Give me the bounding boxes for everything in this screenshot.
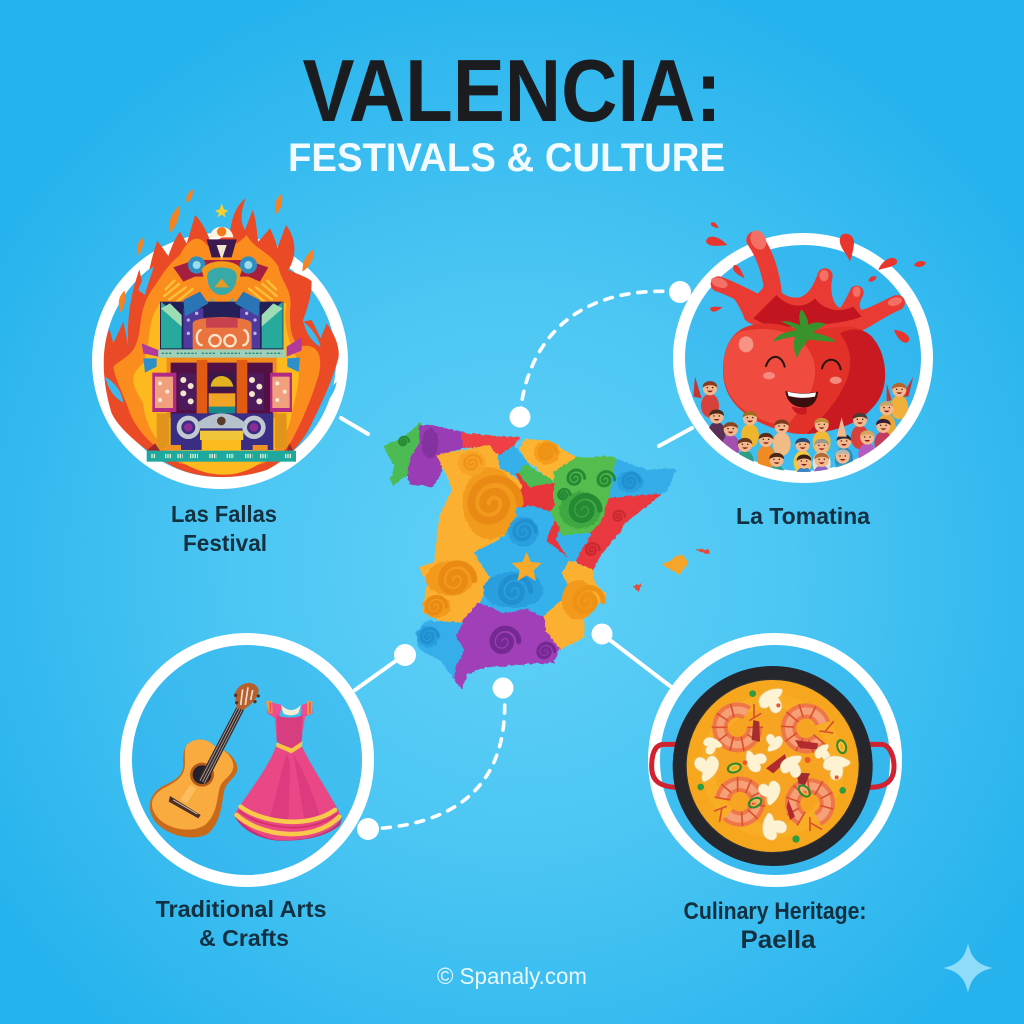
label: Las Fallas Festival xyxy=(171,501,277,556)
icon: tomato with splash and crowd xyxy=(693,222,926,491)
stem xyxy=(773,309,836,358)
droplets xyxy=(706,222,926,343)
label: La Tomatina: La Tomatina xyxy=(736,503,870,529)
mask head xyxy=(207,267,237,295)
crowd xyxy=(693,376,914,472)
label: Traditional Arts & Crafts: & Crafts xyxy=(199,925,289,951)
middle tier xyxy=(160,302,283,350)
splash xyxy=(718,240,897,325)
gold feather wings xyxy=(163,280,277,303)
star xyxy=(512,552,542,581)
panel: La Tomatina xyxy=(679,222,927,491)
icon: guitar xyxy=(150,683,260,837)
icon: fallas monument in flames xyxy=(104,189,339,477)
label: Las Fallas Festival: Las Fallas xyxy=(171,501,277,527)
connectors xyxy=(341,281,692,840)
tomato body xyxy=(723,323,884,434)
label: Culinary Heritage: Paella: Paella xyxy=(740,926,817,954)
icon: paella pan xyxy=(652,666,894,866)
panel: Culinary Heritage xyxy=(652,639,896,881)
ring xyxy=(126,639,368,881)
panel: Traditional Arts xyxy=(126,639,368,881)
lower tier xyxy=(167,358,277,418)
title: VALENCIA: xyxy=(302,41,722,140)
label: Las Fallas Festival: Festival xyxy=(183,530,267,556)
ring xyxy=(654,639,896,881)
panel: Las Fallas xyxy=(98,189,342,483)
footer credit: © Spanaly.com xyxy=(437,963,587,989)
panel: Spain map xyxy=(385,424,709,687)
icon: dress xyxy=(234,701,343,841)
label: Traditional Arts & Crafts: Traditional Arts xyxy=(156,896,326,922)
face xyxy=(766,357,841,369)
label: Culinary Heritage: Paella: Culinary Heritage: xyxy=(684,898,866,925)
icon: sparkle xyxy=(943,943,993,993)
top ornament xyxy=(215,203,228,217)
ring xyxy=(98,239,342,483)
label: Culinary Heritage: Paella xyxy=(684,898,866,954)
holes in flames xyxy=(105,266,337,407)
swirls xyxy=(399,437,640,658)
regions xyxy=(385,424,709,687)
blobs xyxy=(417,428,643,647)
label: Traditional Arts & Crafts xyxy=(156,896,326,951)
wheels & base xyxy=(171,413,273,450)
ring xyxy=(679,239,927,477)
subtitle: FESTIVALS & CULTURE xyxy=(288,136,725,180)
